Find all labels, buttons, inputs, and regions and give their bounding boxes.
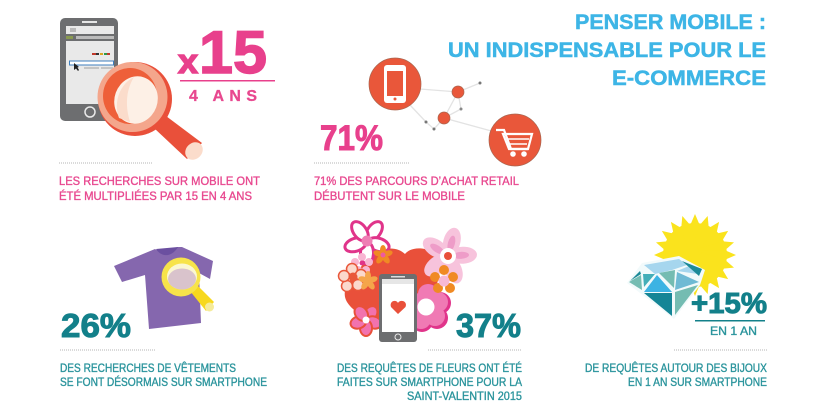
network diagram [410, 82, 495, 132]
big number x15: 15 [199, 19, 267, 86]
title [448, 11, 766, 90]
caption: DES REQUÊTES DE FLEURS ONT ÉTÉ [337, 360, 522, 375]
icon: shopping cart circle [489, 114, 541, 166]
panel: 37% flowers [337, 219, 522, 403]
icon: magnifying glass [98, 62, 206, 163]
period label: EN 1 AN [710, 324, 757, 338]
panel: 26% clothing [60, 247, 267, 389]
caption [59, 174, 261, 203]
caption: SAINT-VALENTIN 2015 [407, 389, 522, 403]
caption: DES RECHERCHES DE VÊTEMENTS [60, 360, 236, 375]
caption [314, 174, 519, 203]
panel: 71% retail journeys [314, 58, 541, 203]
icon: flowers [338, 219, 477, 336]
caption: ÉTÉ MULTIPLIÉES PAR 15 EN 4 ANS [59, 188, 252, 203]
period label: 4 ANS [189, 88, 257, 105]
panel: 15% jewellery [585, 214, 768, 389]
caption: FAITES SUR SMARTPHONE POUR LA [337, 375, 522, 389]
title: PENSER MOBILE : [575, 11, 766, 34]
caption: DÉBUTENT SUR LE MOBILE [314, 188, 465, 203]
big number +15%: +15% [691, 288, 767, 320]
icon: yellow magnifier [162, 258, 214, 312]
title: UN INDISPENSABLE POUR LE [448, 39, 766, 62]
caption [337, 360, 522, 403]
panel: mobile searches x15 [59, 18, 275, 203]
caption: 71% DES PARCOURS D’ACHAT RETAIL [314, 174, 519, 188]
icon: sun [654, 214, 736, 296]
caption [585, 360, 767, 389]
icon: heart [345, 248, 440, 330]
big number 71%: 71% [320, 119, 383, 158]
caption: SE FONT DÉSORMAIS SUR SMARTPHONE [60, 374, 267, 389]
big number 37%: 37% [456, 307, 521, 344]
icon: t-shirt [114, 247, 213, 329]
icon: diamond [627, 256, 705, 319]
caption: LES RECHERCHES SUR MOBILE ONT [59, 174, 261, 188]
big number x15: x [178, 43, 198, 81]
caption [60, 360, 267, 389]
title: E-COMMERCE [612, 67, 766, 90]
big number 26%: 26% [61, 307, 131, 344]
icon: smartphone with heart [379, 274, 417, 342]
caption: EN 1 AN SUR SMARTPHONE [628, 375, 767, 389]
caption: DE REQUÊTES AUTOUR DES BIJOUX [585, 360, 767, 375]
icon: phone circle [369, 58, 421, 110]
icon: smartphone [60, 18, 118, 121]
